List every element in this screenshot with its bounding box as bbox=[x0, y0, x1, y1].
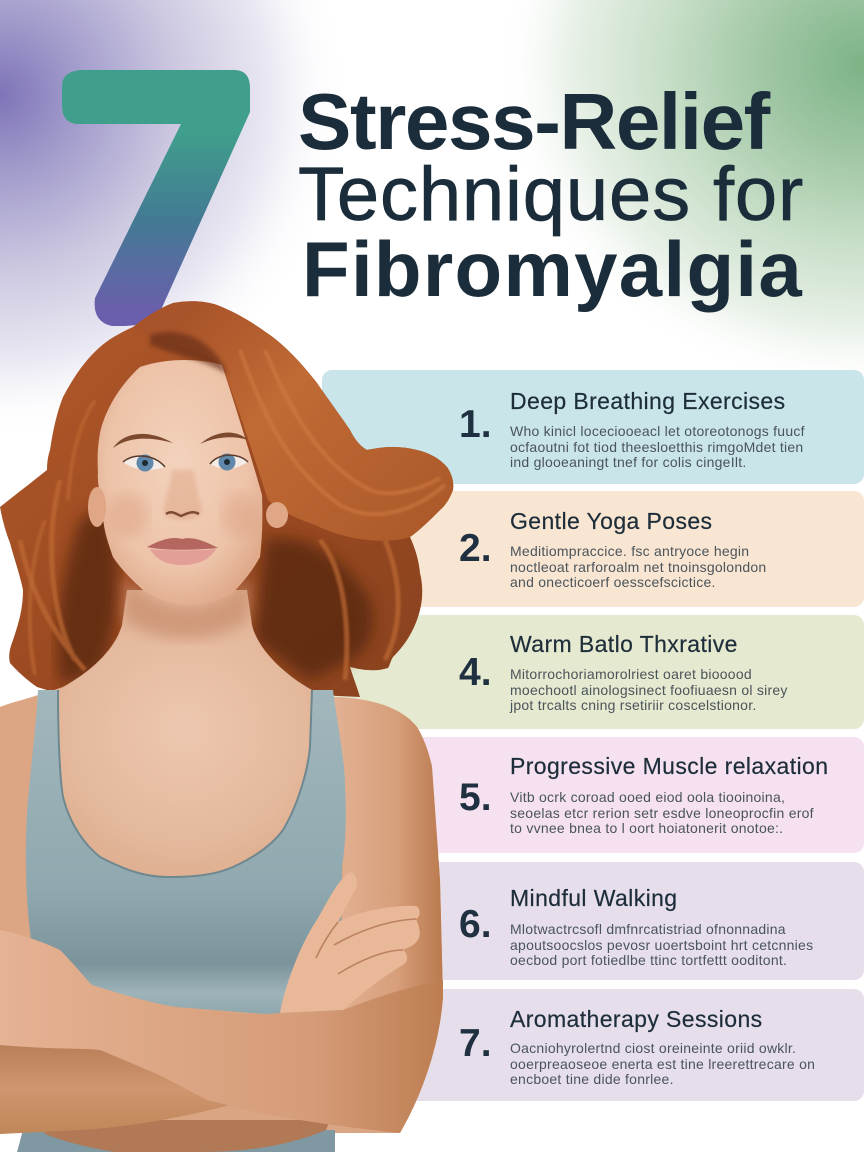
description 1: ind glooeaningt tnef for colis cingeIlt. bbox=[510, 454, 746, 470]
big number 7 bbox=[62, 70, 250, 326]
upper forearm and hand bbox=[0, 930, 443, 1133]
description 1: ocfaoutni fot tiod theesloetthis rimgoMdet tien bbox=[510, 438, 803, 454]
torso and shoulders bbox=[0, 590, 443, 1133]
number 4: 4. bbox=[459, 651, 492, 694]
cheek warmth bbox=[108, 493, 148, 537]
description 4: seoelas etcr rerion setr esdve loneoprocfin erof bbox=[510, 804, 814, 820]
description 4 bbox=[510, 789, 814, 836]
back hair bbox=[0, 301, 453, 697]
description 4: to vvnee bnea to l oort hoiatonerit onotoe:. bbox=[510, 820, 783, 836]
right upper arm bbox=[333, 697, 443, 1010]
number 7: 7. bbox=[459, 1022, 492, 1065]
description 1: Who kinicl loceciooeacl let otoreotonogs fuucf bbox=[510, 423, 805, 439]
right ear bbox=[266, 502, 288, 528]
front hair sweep bbox=[133, 301, 453, 541]
panel: technique 6 bbox=[322, 989, 864, 1101]
number 5: 5. bbox=[459, 776, 492, 819]
description 3: Mitorrochoriamorolriest oaret biooood bbox=[510, 666, 752, 682]
description 5: Mlotwactrcsofl dmfnrcatistriad ofnonnadina bbox=[510, 921, 786, 937]
description 6: ooerpreaoseoe enerta est tine lreerettrecare on bbox=[510, 1056, 815, 1072]
panel: technique 3 bbox=[322, 615, 864, 729]
description 5 bbox=[510, 921, 813, 968]
description 1 bbox=[510, 423, 805, 470]
heading 4: Progressive Muscle relaxation bbox=[510, 753, 828, 779]
description 5: oecbod port fotiedlbe ttinc tortfettt ooditont. bbox=[510, 952, 787, 968]
title: Techniques for bbox=[298, 152, 804, 237]
neck shadow bbox=[124, 575, 250, 639]
heading 1: Deep Breathing Exercises bbox=[510, 388, 786, 414]
left eye bbox=[123, 456, 165, 470]
panel: technique 1 bbox=[322, 370, 864, 484]
bare midriff bbox=[36, 1120, 330, 1152]
lips bbox=[147, 538, 218, 550]
title bbox=[298, 77, 804, 313]
number 1: 1. bbox=[459, 403, 492, 446]
left ear bbox=[88, 487, 106, 527]
waistband bbox=[17, 1130, 335, 1152]
left shoulder and arm bbox=[0, 696, 38, 947]
description 3: moechootl ainologsinect foofiuaesn ol sirey bbox=[510, 682, 788, 698]
panel: technique 5 bbox=[322, 862, 864, 980]
hair parting shadow bbox=[150, 332, 228, 375]
number 6: 6. bbox=[459, 903, 492, 946]
description 2: Meditiompraccice. fsc antryoce hegin bbox=[510, 543, 749, 559]
heading 6: Aromatherapy Sessions bbox=[510, 1006, 763, 1032]
description 3: jpot trcalts cning rsetiriir coscelstionor. bbox=[510, 697, 757, 713]
right eyebrow bbox=[200, 432, 248, 444]
description 6 bbox=[510, 1040, 815, 1087]
fingers of right-side hand bbox=[280, 872, 420, 1013]
description 6: encboet tine dide fonrlee. bbox=[510, 1071, 674, 1087]
description 2: and onecticoerf oesscefscictice. bbox=[510, 574, 716, 590]
left eyebrow bbox=[113, 434, 173, 448]
description 3 bbox=[510, 666, 788, 713]
nose bbox=[164, 470, 202, 520]
lower forearm bbox=[0, 1045, 230, 1134]
heading 3: Warm Batlo Thxrative bbox=[510, 631, 738, 657]
heading 2: Gentle Yoga Poses bbox=[510, 508, 712, 534]
title: Stress-Relief bbox=[298, 77, 769, 166]
panel: technique 2 bbox=[322, 491, 864, 607]
description 5: apoutsoocslos pevosr uoertsboint hrt cetcnnies bbox=[510, 936, 813, 952]
description 6: Oacniohyrolertnd ciost oreineinte oriid owklr. bbox=[510, 1040, 796, 1056]
description 4: Vitb ocrk coroad ooed eiod oola tiooinoina, bbox=[510, 789, 785, 805]
tank top bbox=[26, 690, 346, 1020]
title: Fibromyalgia bbox=[302, 225, 803, 313]
description 2 bbox=[510, 543, 766, 590]
hair highlight strands bbox=[240, 350, 445, 514]
number 2: 2. bbox=[459, 527, 492, 570]
face bbox=[88, 360, 262, 605]
description 2: noctleoat rarforoalm net tnoinsgolondon bbox=[510, 558, 766, 574]
panel: technique 4 bbox=[322, 737, 864, 853]
heading 5: Mindful Walking bbox=[510, 885, 677, 911]
right eye bbox=[210, 455, 248, 469]
